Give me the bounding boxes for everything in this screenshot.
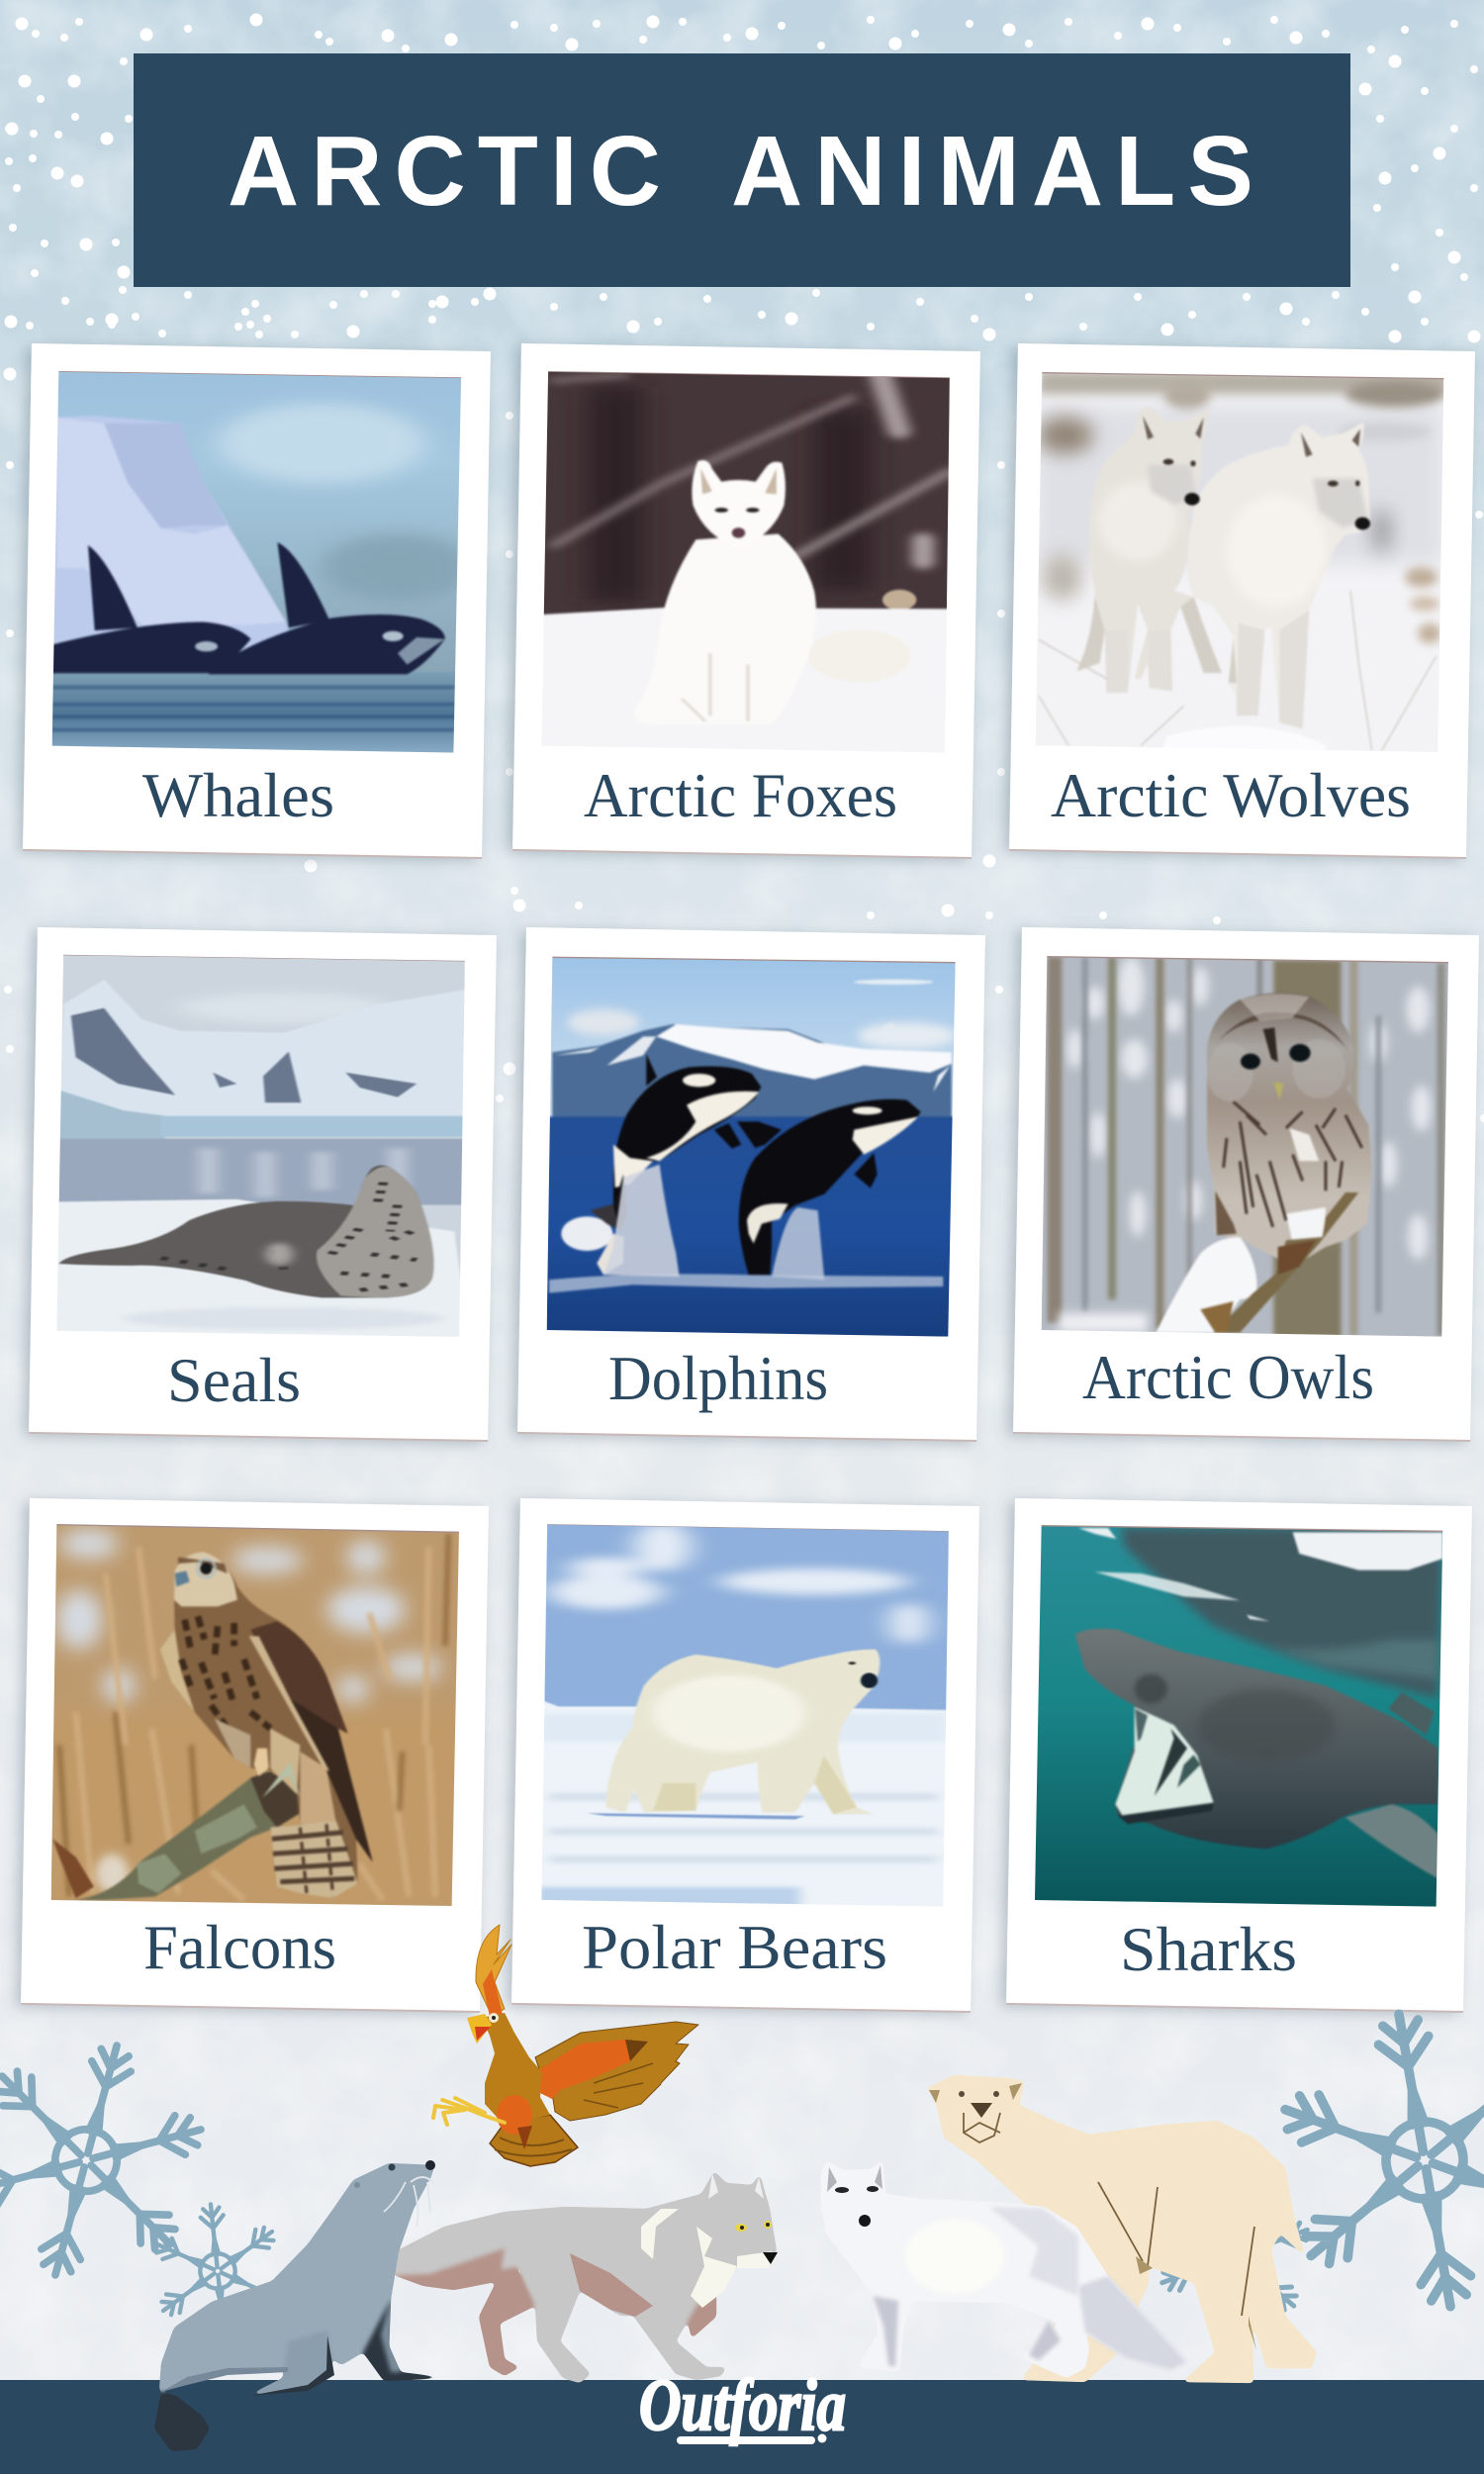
label: Whales: Whales xyxy=(142,760,334,830)
label: Sharks: Sharks xyxy=(1120,1914,1297,1984)
photo: white arctic fox xyxy=(542,372,950,752)
label: Falcons: Falcons xyxy=(143,1912,336,1982)
illustration: polar bear xyxy=(926,2075,1317,2383)
icon: large snowflake right xyxy=(1259,1990,1484,2331)
title banner xyxy=(134,53,1350,287)
photo: basking shark underwater xyxy=(1029,1521,1451,1910)
photo: orcas and iceberg xyxy=(51,372,461,752)
title text: ANIMALS xyxy=(731,116,1253,227)
illustration: cartoon falcon xyxy=(433,1925,698,2166)
panel: Arctic Owls card xyxy=(1013,927,1479,1441)
photo: falcon on branch xyxy=(46,1521,468,1910)
panel: Arctic Wolves card xyxy=(1009,343,1475,858)
photo: leaping orcas xyxy=(541,953,963,1341)
icon: small snowflake behind bear xyxy=(1149,2167,1321,2345)
illustration: seal xyxy=(154,2160,449,2451)
label: Seals: Seals xyxy=(167,1345,301,1415)
panel: Whales card xyxy=(23,343,491,858)
panel: Seals card xyxy=(29,927,497,1441)
panel: Sharks card xyxy=(1006,1498,1472,2012)
photo: leopard seal on ice xyxy=(47,951,474,1341)
panel: Dolphins card xyxy=(517,927,985,1441)
label: Polar Bears: Polar Bears xyxy=(582,1912,887,1982)
logo: Outforia: Outforia xyxy=(639,2365,846,2446)
photo: two arctic wolves xyxy=(1029,366,1457,762)
label: Arctic Owls: Arctic Owls xyxy=(1082,1342,1374,1412)
title text xyxy=(228,116,1253,227)
label: Arctic Foxes: Arctic Foxes xyxy=(584,760,897,830)
label: Arctic Wolves: Arctic Wolves xyxy=(1051,760,1411,830)
icon: large snowflake left xyxy=(0,2017,226,2304)
illustration: grey wolf xyxy=(394,2171,778,2383)
footer band xyxy=(0,2380,1484,2474)
illustration: arctic fox xyxy=(821,2159,1187,2378)
panel: Arctic Foxes card xyxy=(512,343,980,858)
icon: small snowflake left xyxy=(147,2198,288,2344)
panel: Falcons card xyxy=(21,1498,489,2012)
label: Dolphins: Dolphins xyxy=(608,1343,828,1413)
photo: tawny owl on branch xyxy=(1036,953,1457,1343)
title text: ARCTIC xyxy=(228,116,661,227)
panel: Polar Bears card xyxy=(511,1498,979,2012)
photo: polar bear on snow xyxy=(535,1521,961,1908)
